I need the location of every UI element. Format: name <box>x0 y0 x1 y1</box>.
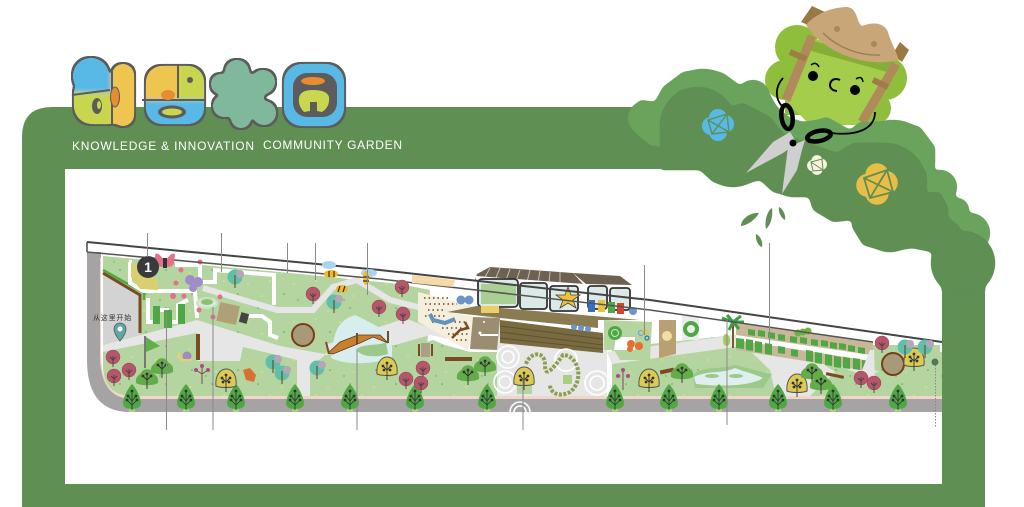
glass panel three <box>550 286 578 311</box>
garden map <box>87 233 942 430</box>
title <box>72 58 344 128</box>
palm trees <box>722 315 744 348</box>
dotted post marker <box>932 358 938 366</box>
leader lines <box>148 233 936 430</box>
snail <box>178 352 192 360</box>
roof ribs <box>484 268 560 283</box>
pergola bed <box>197 298 249 325</box>
bench <box>481 306 499 313</box>
face <box>808 63 863 95</box>
wall <box>87 242 942 342</box>
icon: yellow rose <box>856 163 898 205</box>
paved patch <box>470 317 500 350</box>
falling leaves <box>741 207 785 247</box>
handles <box>780 104 832 143</box>
bins <box>588 300 624 314</box>
building backing <box>476 276 632 318</box>
text: start here: 从这里开始 <box>93 313 132 322</box>
butterfly pink <box>155 254 175 268</box>
hat shade on body <box>808 40 895 72</box>
fox <box>243 368 256 382</box>
picnic table <box>419 343 432 357</box>
glass panel four <box>588 286 607 309</box>
straps <box>786 36 896 122</box>
icon: location pin <box>114 323 126 341</box>
glass panel two <box>520 283 547 309</box>
colourful wall strip <box>412 275 455 287</box>
mascot body <box>785 38 895 125</box>
lawn patch west <box>103 333 297 396</box>
cone trees row <box>123 384 907 412</box>
title colour accents <box>72 64 337 124</box>
pond east <box>693 365 772 388</box>
parking bay <box>103 270 144 345</box>
scissors <box>746 78 875 194</box>
spiral planter <box>526 354 578 394</box>
lawn garden beds right section <box>612 335 940 396</box>
number badge: 1 <box>144 259 152 275</box>
plaza swirls <box>494 346 609 412</box>
number badge <box>137 256 159 278</box>
dome tree plot <box>517 383 532 394</box>
subtitle: COMMUNITY GARDEN <box>263 138 402 152</box>
lawn patch at the mid path <box>310 355 384 396</box>
pivot <box>790 140 796 146</box>
hat <box>801 6 909 62</box>
dark hedge <box>660 87 995 295</box>
platform <box>447 306 640 328</box>
upper gravel paths <box>203 280 430 310</box>
light hedge <box>628 69 990 253</box>
wooden deck <box>500 320 603 353</box>
lawn left section <box>103 256 430 396</box>
ring sculpture <box>682 316 699 340</box>
main gravel paths <box>103 320 880 396</box>
caterpillar <box>794 328 812 336</box>
flower plots <box>170 260 222 320</box>
dome trees <box>216 348 924 397</box>
hedge arch <box>628 69 995 295</box>
cords <box>777 78 875 134</box>
flag <box>144 336 160 368</box>
tan panel with sun <box>659 320 676 358</box>
planting rows <box>153 304 185 328</box>
green frame <box>22 107 985 507</box>
lawn patch south of the pond <box>381 340 497 396</box>
round soil bed <box>292 324 904 375</box>
green wall <box>481 284 516 304</box>
roof <box>475 267 583 284</box>
pond and bridge <box>326 315 392 363</box>
red trees <box>106 280 889 393</box>
blades <box>746 132 805 194</box>
mascot leafy back <box>765 25 907 124</box>
glass panel one <box>478 279 518 307</box>
bees <box>322 261 377 293</box>
shrub trees <box>136 356 832 394</box>
vegetable beds <box>736 323 874 372</box>
subtitle <box>72 138 402 153</box>
mascot <box>765 6 909 125</box>
glass panel five <box>610 288 630 310</box>
star <box>556 287 580 308</box>
title lettering: 创智农园 <box>78 67 340 123</box>
yellow sandy patch <box>131 263 158 290</box>
subtitle: KNOWLEDGE & INNOVATION <box>72 139 254 153</box>
butterfly purple <box>185 275 203 292</box>
blue barrels <box>456 296 637 332</box>
start label block <box>93 313 132 341</box>
icon: white rose <box>807 155 827 175</box>
blossom tree <box>194 364 630 390</box>
white winding walkways <box>129 262 278 338</box>
icon: blue rose <box>702 109 734 141</box>
right garden block with spiral <box>604 320 652 360</box>
second roof <box>573 273 632 285</box>
building <box>447 267 640 332</box>
lawn plot beside the wall <box>874 345 942 396</box>
teal trees <box>228 270 934 384</box>
brown benches <box>196 334 844 379</box>
road and footpath edge <box>87 252 942 412</box>
right path through beds <box>860 350 875 378</box>
sandbox play area <box>418 292 477 350</box>
orange butterfly <box>627 340 643 352</box>
